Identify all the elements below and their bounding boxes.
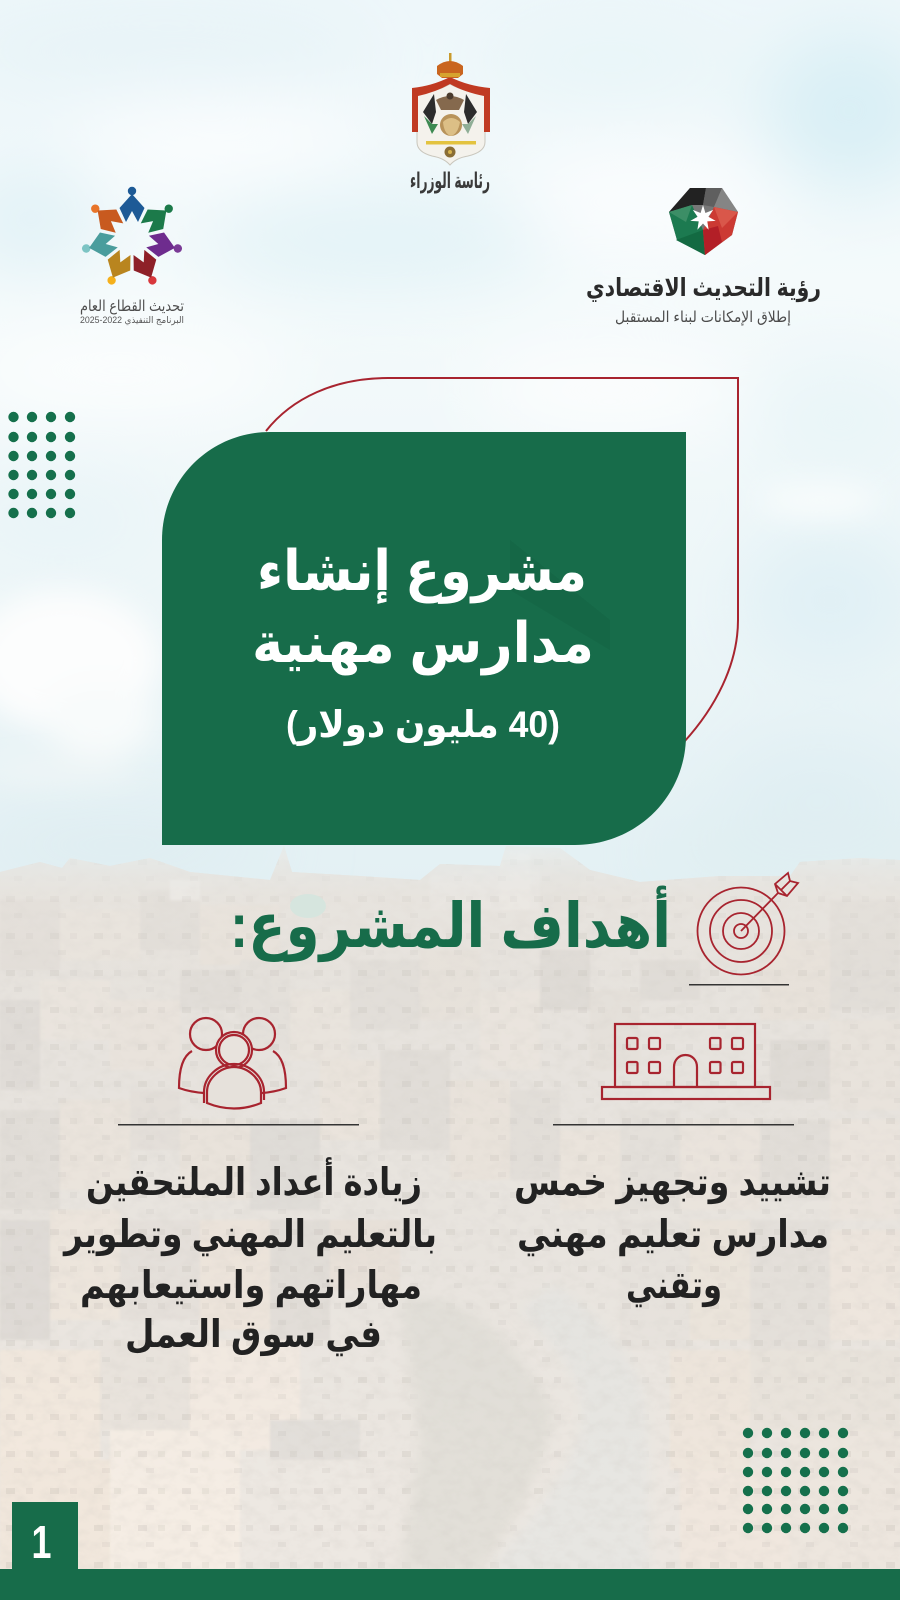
text block: objective 1: مدارس تعليم مهني [517,1214,829,1257]
panel: project title [162,432,686,845]
text block: objective 2 [62,1157,437,1356]
red outline behind title panel [266,378,738,742]
divider: under school icon [553,1124,794,1126]
project cost: (40 مليون دولار) [286,704,560,746]
text block: objective 1 [514,1162,831,1308]
background: washed-out city photograph [0,840,900,1600]
icon: people group [179,1018,286,1108]
icon: target with arrow [698,873,798,974]
background: sky with clouds [0,0,900,1000]
coat of arms emblem [412,53,490,165]
title line 2: مدارس مهنية [252,611,594,676]
divider: under people icon [118,1124,359,1126]
text block: objective 2: بالتعليم المهني وتطوير [62,1214,437,1257]
text block: objective 2: في سوق العمل [125,1314,382,1356]
logo tagline: إطلاق الإمكانات لبناء المستقبل [615,309,791,326]
text block: objective 1: تشييد وتجهيز خمس [514,1162,831,1205]
text block: objective 1: وتقني [626,1265,722,1308]
page number badge: 1 [32,1516,52,1568]
dot grid: top left [8,412,75,518]
text block: objective 2: مهاراتهم واستيعابهم [80,1265,422,1308]
logo: public sector modernisation ring of people [79,187,185,290]
title line 1: مشروع إنشاء [257,539,587,604]
icon: school building [602,1024,770,1099]
heading: project objectives: أهداف المشروع: [230,885,671,962]
dot grid: bottom right [743,1428,848,1533]
text block: objective 2: زيادة أعداد الملتحقين [86,1157,422,1204]
logo: economic modernisation vision mark [669,188,738,255]
divider: under target [689,984,789,986]
logo title: economic modernisation vision: رؤية التحديث الاقتصادي [586,274,821,303]
faint flag shadow [510,540,610,650]
emblem caption: prime ministry: رئاسة الوزراء [410,168,490,194]
logo title: public sector modernisation: تحديث القطاع العام [80,298,184,315]
footer bar [0,1569,900,1600]
logo subtitle: executive programme: البرنامج التنفيذي 2022-2025 [80,315,184,325]
page number badge [12,1502,78,1570]
